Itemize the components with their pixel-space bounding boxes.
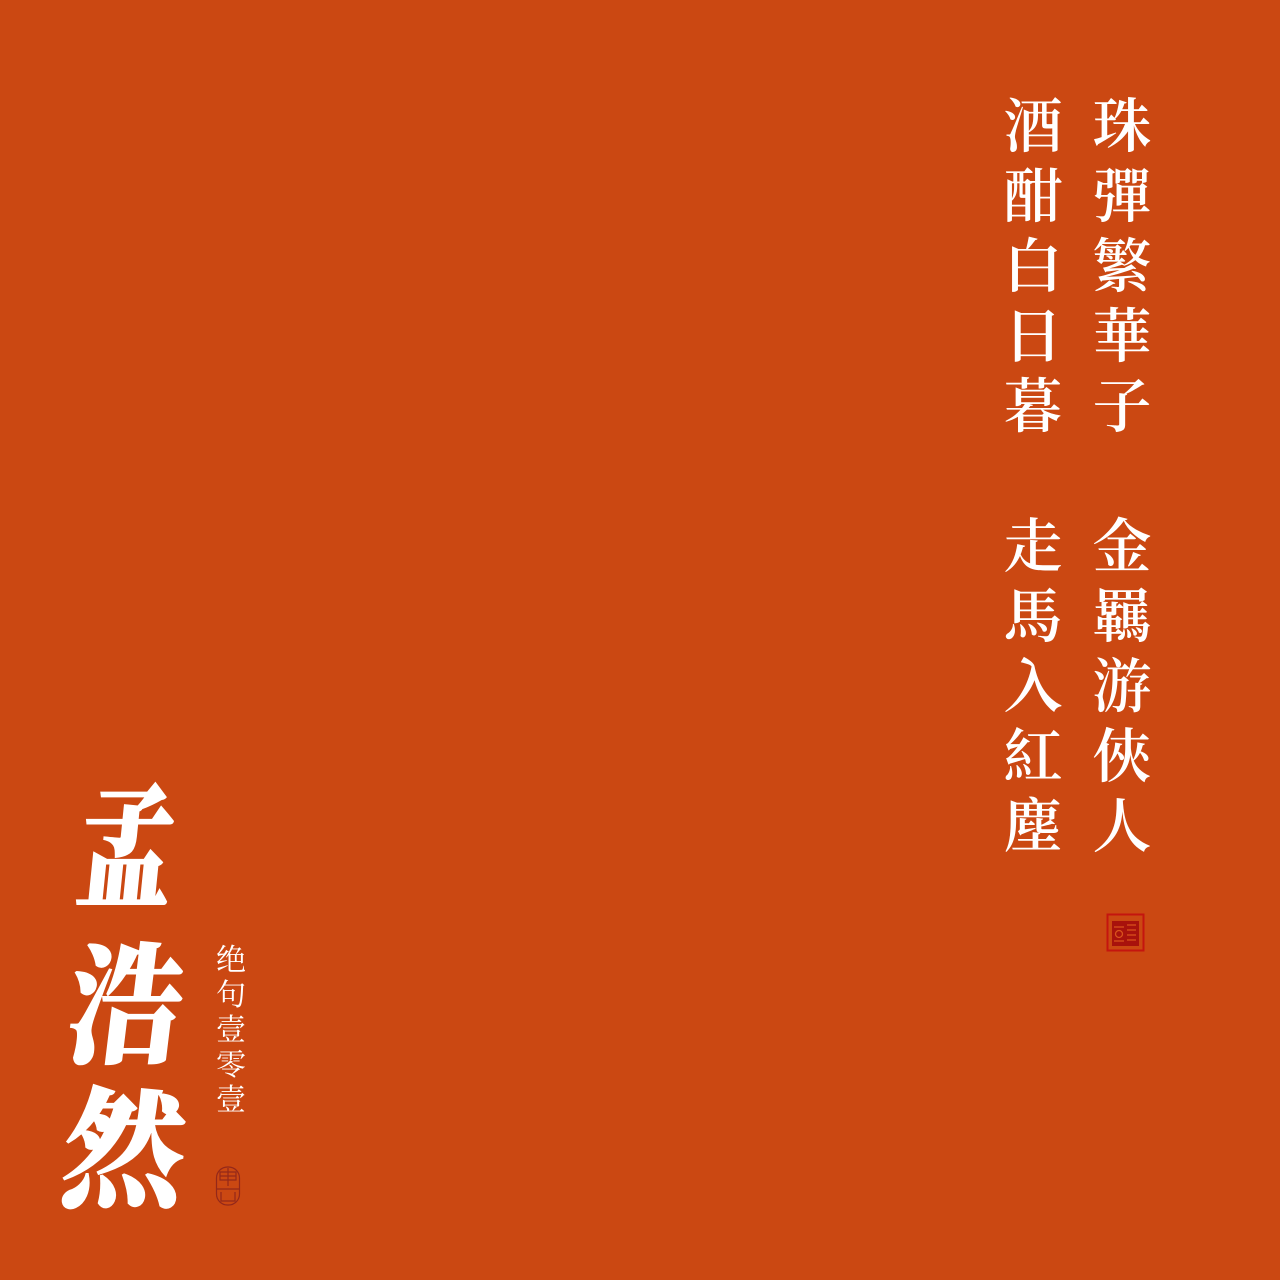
poem column: third line: 俠 (1092, 724, 1152, 790)
icon: small oval seal (216, 1167, 240, 1205)
subtitle: poem number: 句 (216, 979, 246, 1012)
author title: calligraphic name: 然 (56, 1082, 200, 1225)
subtitle: poem number: 绝 (216, 944, 246, 977)
poem column: fourth line: 馬 (1003, 584, 1063, 650)
poem column: second line: 酒 (1003, 94, 1063, 160)
poem column: first line: 珠 (1092, 94, 1152, 160)
poem column: second line: 暮 (1003, 374, 1063, 440)
poem column: fourth line: 走 (1003, 514, 1063, 580)
poem column: first line (1092, 94, 1152, 440)
author title: calligraphic name: 浩 (60, 938, 190, 1081)
poem column: first line: 子 (1092, 374, 1152, 440)
poem column: fourth line: 紅 (1003, 724, 1063, 790)
poem column: first line: 彈 (1092, 164, 1152, 230)
subtitle: poem number: 壹 (216, 1084, 246, 1117)
poem column: third line: 羈 (1092, 584, 1152, 650)
subtitle: poem number: 壹 (216, 1014, 246, 1047)
subtitle: poem number: 零 (216, 1049, 246, 1082)
poem column: second line (1003, 94, 1063, 440)
poem column: second line: 日 (1003, 304, 1063, 370)
poem column: fourth line: 塵 (1003, 794, 1063, 860)
poem column: second line: 酣 (1003, 164, 1063, 230)
poem column: first line: 繁 (1092, 234, 1152, 300)
author title: calligraphic name: 孟 (72, 778, 181, 925)
poem column: third line (1092, 514, 1152, 860)
author title: calligraphic name (56, 778, 200, 1225)
poem column: third line: 金 (1092, 514, 1152, 580)
subtitle: poem number (216, 944, 246, 1117)
icon: red square seal (1108, 914, 1144, 950)
poem column: first line: 華 (1092, 304, 1152, 370)
poem column: second line: 白 (1003, 234, 1063, 300)
poem column: fourth line: 入 (1003, 654, 1063, 720)
poem column: third line: 人 (1092, 794, 1152, 860)
poem column: third line: 游 (1092, 654, 1152, 720)
poem column: fourth line (1003, 514, 1063, 860)
